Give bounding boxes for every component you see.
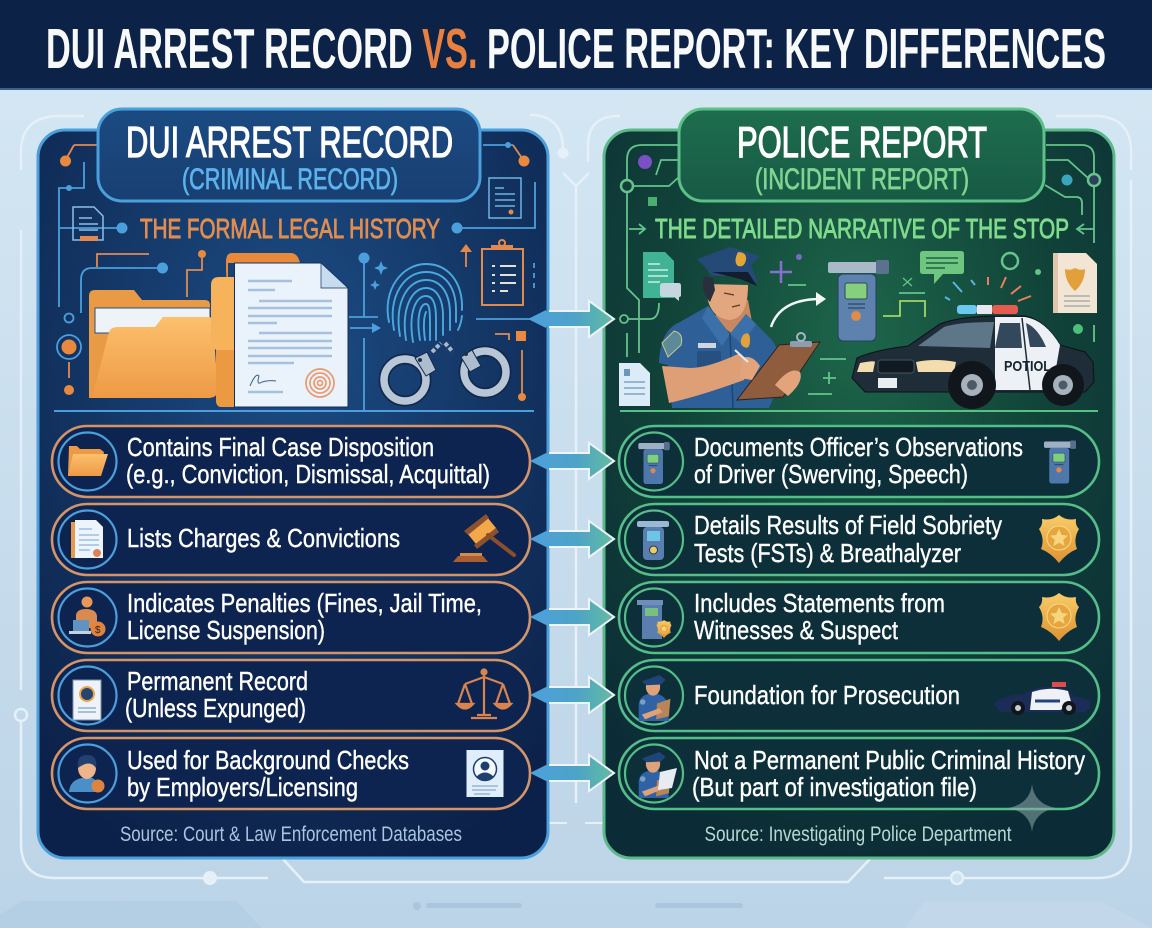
row: penalties: License Suspension) (127, 615, 325, 645)
arrow: row 1 (530, 443, 614, 479)
row: background checks (52, 738, 530, 809)
panel divider (620, 410, 1098, 412)
header: police report: POLICE REPORT (737, 118, 987, 167)
row: field sobriety tests: Details Results of Field Sobriety (694, 510, 1002, 540)
icon: clipboard (482, 240, 523, 305)
arrow: curved (771, 292, 826, 327)
icon: breathalyzer (828, 260, 889, 341)
header: police report (679, 109, 1044, 201)
row: witness statements: Includes Statements from (694, 588, 945, 618)
row: permanent record: Permanent Record (127, 666, 308, 696)
icon: teal document with speech (643, 252, 681, 301)
header: DUI arrest record (98, 109, 480, 201)
source note: right: Source: Investigating Police Department (704, 823, 1012, 846)
row: penalties: $ (95, 625, 101, 636)
illustration: police officer (659, 247, 820, 408)
row: not permanent: (But part of investigation file) (692, 772, 977, 802)
icon: breathalyzer small (1044, 440, 1076, 484)
row: field sobriety tests (619, 504, 1099, 575)
row: final case disposition (52, 426, 530, 497)
row: permanent record: (Unless Expunged) (125, 693, 306, 723)
arrow: illustrations (528, 301, 614, 337)
row: final case disposition: Contains Final Case Disposition (127, 432, 434, 462)
icon: small document right (489, 178, 521, 218)
icon: scales of justice (457, 670, 511, 718)
comparison arrows (528, 301, 614, 791)
icon: small police car (994, 682, 1090, 715)
row: officer's observations: Documents Officer’s Observations (694, 432, 1023, 462)
source note: left: Source: Court & Law Enforcement Databases (120, 823, 462, 846)
sparkle (1008, 784, 1056, 832)
subheading: formal legal history: THE FORMAL LEGAL HISTORY (140, 213, 440, 244)
panel: DUI arrest record (38, 109, 548, 858)
arrow: row 2 (530, 521, 614, 557)
row: witness statements: Witnesses & Suspect (694, 615, 899, 645)
icon: small document (619, 363, 650, 406)
icon: gavel (453, 514, 514, 562)
row: officer's observations (619, 426, 1099, 497)
icon: report with badge (1053, 253, 1097, 313)
icon: small document left (73, 207, 103, 241)
panel divider (54, 410, 534, 412)
circuit decorations left (57, 145, 535, 410)
row: foundation for prosecution: Foundation for Prosecution (694, 680, 960, 710)
row: officer's observations: of Driver (Swerving, Speech) (694, 459, 968, 489)
arrow: row 3 (530, 599, 614, 635)
illustration: police car: POTIOL (1004, 358, 1051, 375)
row: field sobriety tests: Tests (FSTs) & Breathalyzer (694, 538, 961, 568)
row: background checks: by Employers/Licensing (127, 772, 358, 802)
row: witness statements (619, 582, 1099, 653)
icon: legal document (234, 263, 348, 407)
row: lists charges (52, 504, 530, 575)
row: penalties: Indicates Penalties (Fines, Jail Time, (127, 588, 482, 618)
arrow: row 5 (530, 755, 614, 791)
row: lists charges: Lists Charges & Convictions (127, 523, 400, 553)
icon: fingerprint (388, 264, 462, 342)
row: final case disposition: (e.g., Conviction, Dismissal, Acquittal) (126, 459, 490, 489)
row: foundation for prosecution (619, 660, 1099, 731)
arrow: row 4 (530, 677, 614, 713)
panel: police report (604, 109, 1114, 858)
row: background checks: Used for Background Checks (127, 745, 409, 775)
icon: chat bubble (920, 251, 964, 284)
icon: second folder (211, 253, 300, 407)
icon: handcuffs (384, 343, 506, 401)
header banner (0, 0, 1152, 90)
icon: gold badge (1039, 515, 1079, 563)
header: police report: (INCIDENT REPORT) (755, 163, 969, 196)
row: permanent record (52, 660, 530, 731)
icon: ID document (466, 750, 504, 797)
row: not permanent (619, 738, 1099, 809)
circuit decorations right (620, 145, 1100, 394)
row: penalties (52, 582, 530, 653)
illustration: police car (852, 277, 1094, 409)
row: not permanent: Not a Permanent Public Criminal History (694, 745, 1085, 775)
icon: gold badge (1039, 593, 1079, 641)
header: DUI arrest record: DUI ARREST RECORD (126, 118, 453, 167)
icon: folder (89, 290, 218, 398)
header: DUI arrest record: (CRIMINAL RECORD) (182, 163, 398, 196)
